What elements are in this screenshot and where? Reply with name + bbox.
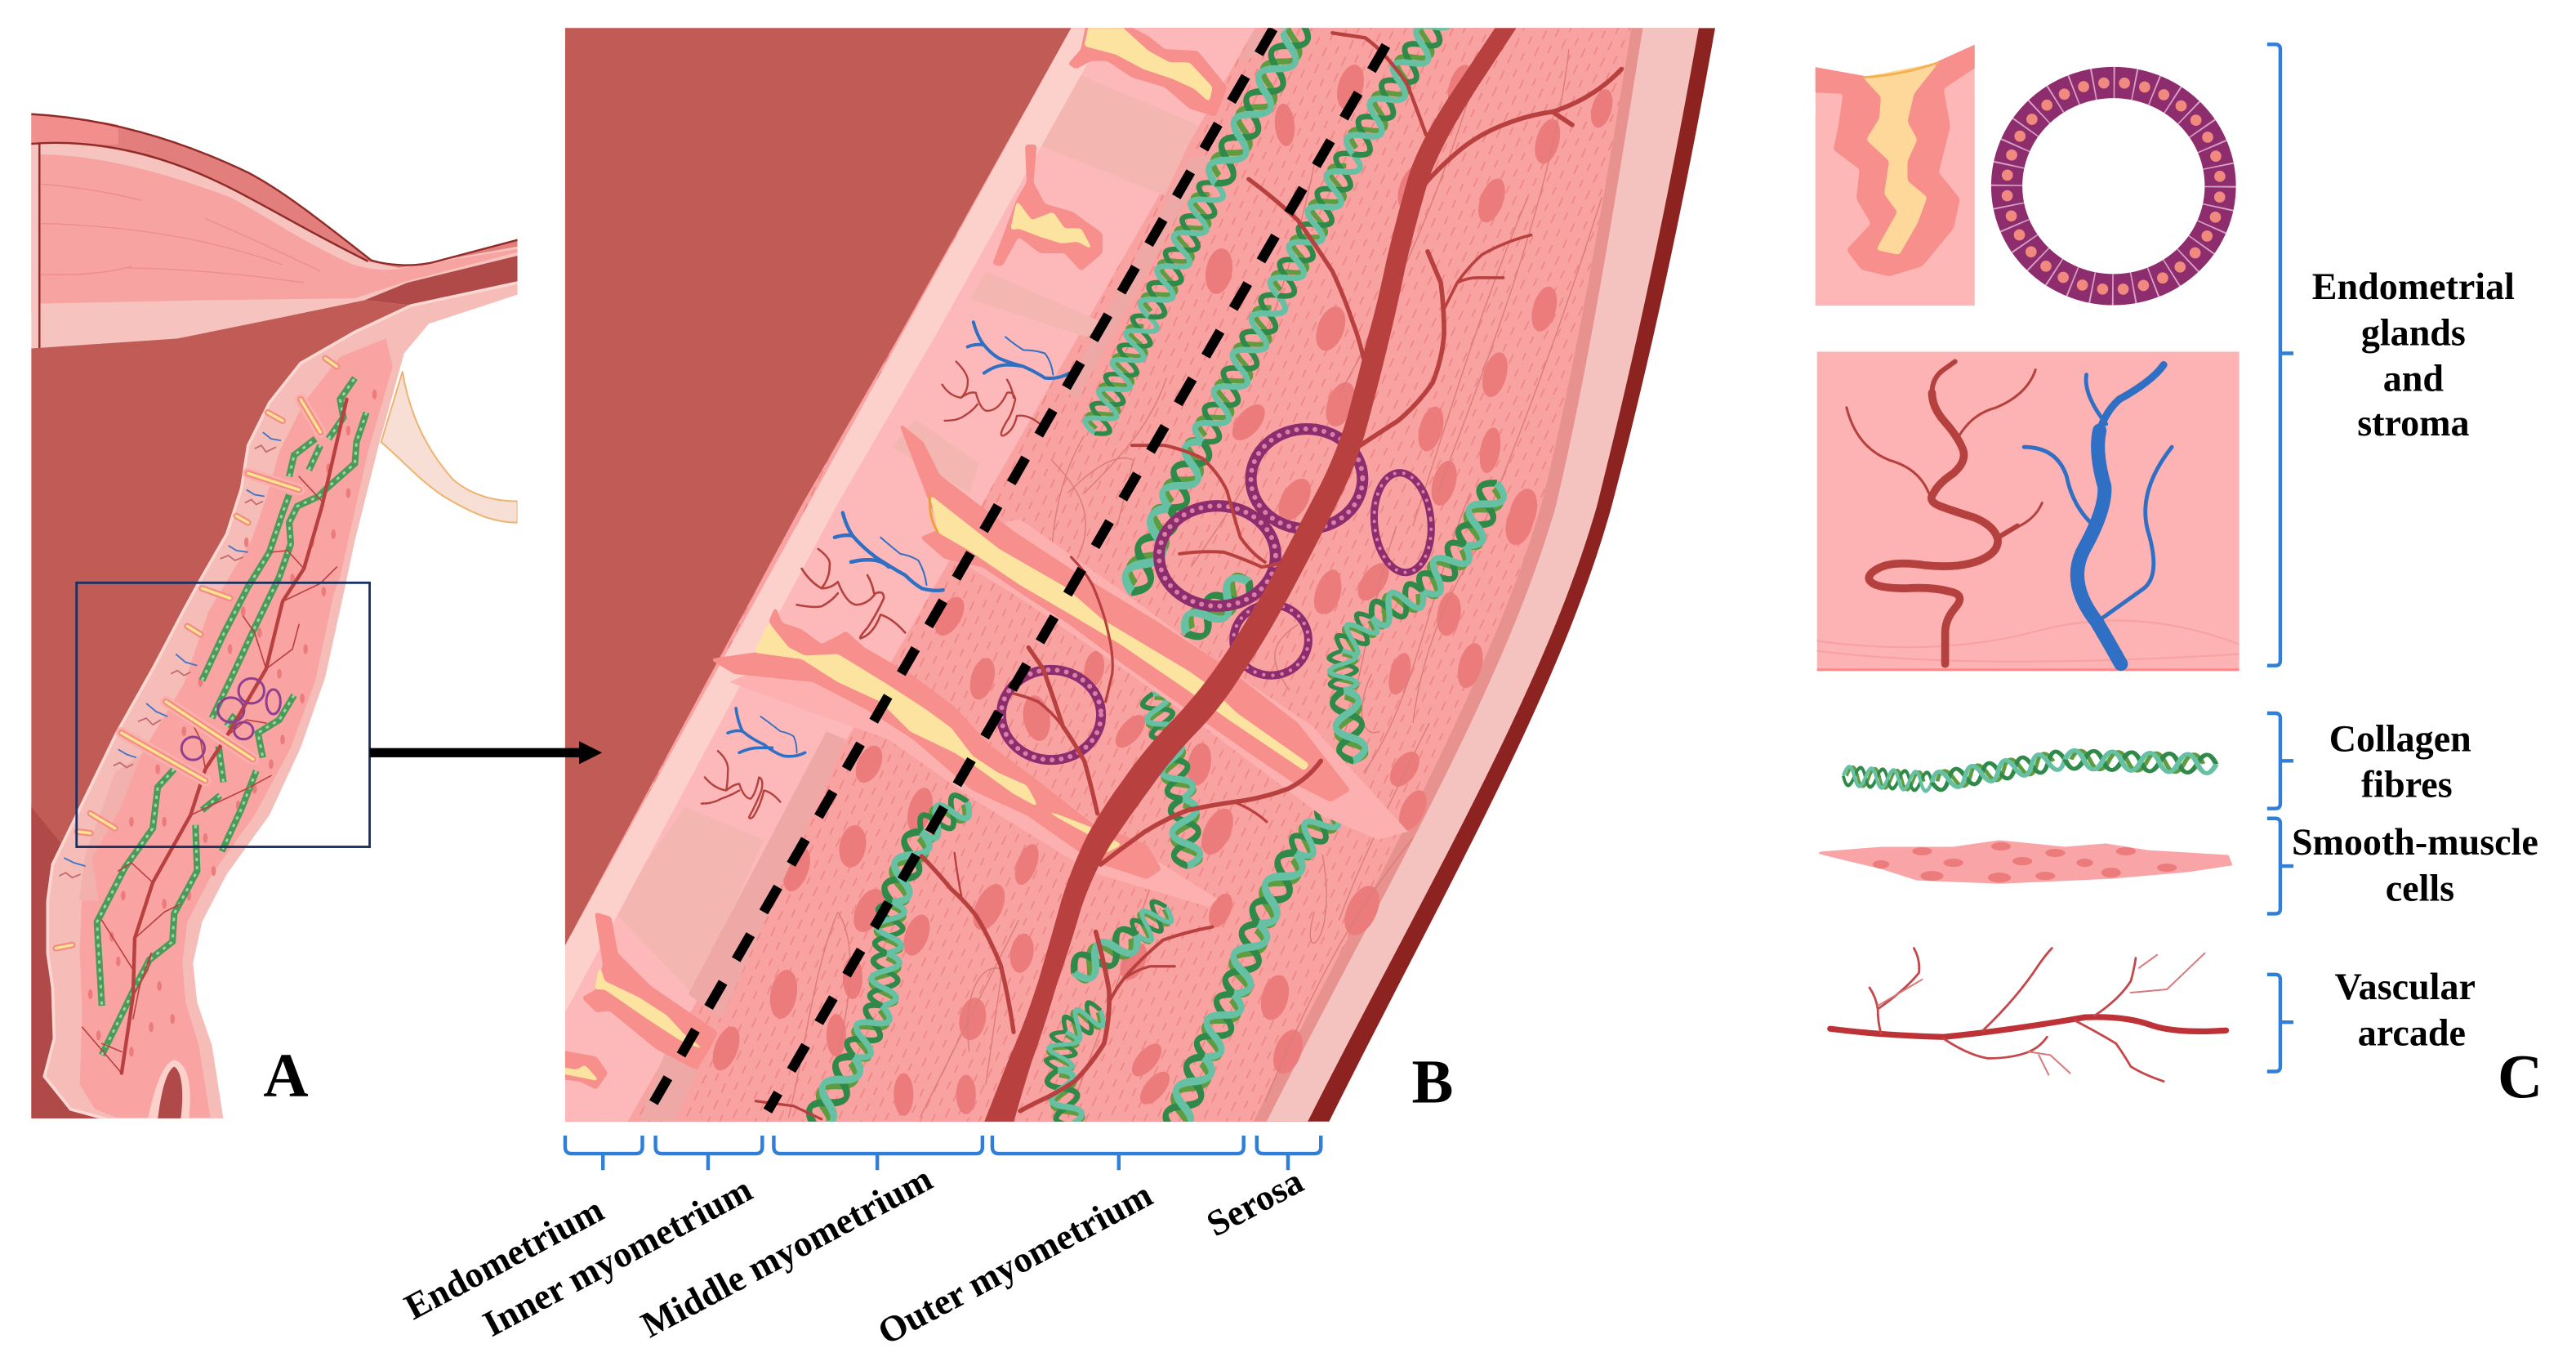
- vessels tile 2: [797, 513, 943, 638]
- bracket: glands and stroma: [2267, 44, 2293, 666]
- wiggly vessels A: [59, 432, 281, 877]
- fibre 4: [804, 791, 974, 1132]
- collagen fibres A: [97, 378, 367, 1055]
- bracket: vascular: [2267, 975, 2293, 1072]
- letter A: A: [263, 1041, 309, 1110]
- myometrium: [80, 338, 393, 1118]
- letter C: C: [2498, 1042, 2543, 1112]
- luminal epithelium strip: [564, 28, 1108, 1016]
- fibre 3: [1329, 477, 1509, 763]
- arrow A to B: [370, 741, 602, 764]
- artery: [1847, 362, 2042, 664]
- vessels tile 1: [943, 322, 1069, 435]
- bottom layer brackets: [565, 1136, 1321, 1170]
- lower dark cavity: [31, 807, 107, 1119]
- vessels A: [82, 400, 346, 1074]
- layer label: Outer myometrium: Outer myometrium: [871, 1174, 1159, 1353]
- small vessels in stroma: [702, 322, 1069, 819]
- long gland lower: [710, 606, 1218, 907]
- uterine cavity: [564, 28, 1071, 949]
- smooth muscle nuclei: [707, 61, 1616, 1116]
- dashed layer boundary inner to middle myometrium: [768, 46, 1386, 1111]
- label: Collagen fibres: fibres: [2361, 764, 2453, 806]
- label: Endometrial glands and stroma: Endometrial: [2312, 266, 2515, 307]
- gland top: [1067, 16, 1228, 117]
- smooth muscle cell sample: [1821, 841, 2231, 882]
- label: Endometrial glands and stroma: glands: [2361, 311, 2466, 353]
- cervical lumen: [158, 1066, 182, 1119]
- fine fibrils: [789, 49, 1602, 1118]
- endometrium stroma: [565, 28, 1255, 1122]
- gland lower left: [582, 912, 718, 1070]
- gland bottom corner: [550, 1048, 608, 1090]
- arterial branches: [755, 33, 1621, 1119]
- stroma shading: [79, 754, 141, 900]
- long gland upper: [898, 422, 1408, 840]
- uterine wall: [44, 283, 518, 1119]
- muscle texture: [565, 28, 1631, 1122]
- purple gland rings: [1001, 429, 1435, 760]
- dark cavity stripe: [365, 256, 518, 306]
- upper muscle: [39, 154, 518, 304]
- uterine cavity: [31, 300, 411, 1119]
- label: Endometrial glands and stroma: and: [2383, 358, 2444, 400]
- stroma tile with vessels: [1817, 351, 2240, 671]
- label: Vascular arcade: Vascular: [2335, 966, 2476, 1007]
- upper muscle striations: [41, 184, 320, 283]
- serosa: [1253, 28, 1699, 1122]
- vessels tile 3: [702, 708, 805, 819]
- band left lighter part: [31, 115, 118, 145]
- panel B: zoomed uterine wall: [550, 0, 1715, 1136]
- label: Collagen fibres: Collagen: [2329, 717, 2471, 759]
- upper band: [31, 114, 518, 312]
- label: Smooth-muscle cells: cells: [2386, 867, 2454, 908]
- serosa outer dark edge: [565, 28, 1715, 1122]
- panel C: component legend: [1799, 33, 2543, 1112]
- fibre 2: [1120, 2, 1456, 643]
- ligament: [381, 372, 518, 523]
- vein: [2024, 365, 2172, 664]
- box highlighting zoomed region: [77, 583, 370, 847]
- gland tile: [1799, 33, 1991, 306]
- layer label: Inner myometrium: Inner myometrium: [476, 1168, 759, 1345]
- dashed layer boundary endometrium to inner myometrium: [637, 29, 1273, 1131]
- vascular arcade sample: [1830, 949, 2226, 1082]
- layer label: Endometrium: Endometrium: [398, 1189, 610, 1328]
- layer label: Middle myometrium: Middle myometrium: [635, 1158, 938, 1346]
- fibre 5: [1045, 690, 1201, 1128]
- fibre 6: [1161, 801, 1344, 1136]
- main artery: [984, 28, 1517, 1123]
- collagen fibres B: [804, 0, 1509, 1136]
- collagen fibre sample: [1843, 750, 2217, 792]
- bracket: collagen: [2267, 713, 2293, 809]
- inner rim highlight: [44, 283, 518, 1119]
- fibre 1: [1082, 0, 1326, 439]
- rings A: [181, 678, 280, 760]
- myometrium base: [565, 28, 1631, 1122]
- nuclei A: [88, 390, 377, 1056]
- layer label: Serosa: Serosa: [1200, 1160, 1310, 1244]
- glands A: [56, 359, 336, 949]
- darker stromal strips: [639, 28, 1286, 1121]
- grey stromal patches: [613, 74, 1197, 994]
- epithelial gland ring: [2007, 83, 2221, 289]
- bracket: smooth muscle: [2267, 819, 2293, 913]
- label: Endometrial glands and stroma: stroma: [2357, 402, 2469, 444]
- serosa inner strip: [1254, 28, 1643, 1122]
- gland second: [992, 145, 1103, 271]
- panel A: uterus cross-section: [31, 114, 518, 1119]
- letter B: B: [1412, 1047, 1454, 1117]
- pale layer: [31, 144, 518, 348]
- label: Vascular arcade: arcade: [2358, 1011, 2466, 1053]
- band outlines: [31, 114, 518, 370]
- cervical lumen rim: [148, 1060, 190, 1119]
- label: Smooth-muscle cells: Smooth-muscle: [2292, 821, 2538, 863]
